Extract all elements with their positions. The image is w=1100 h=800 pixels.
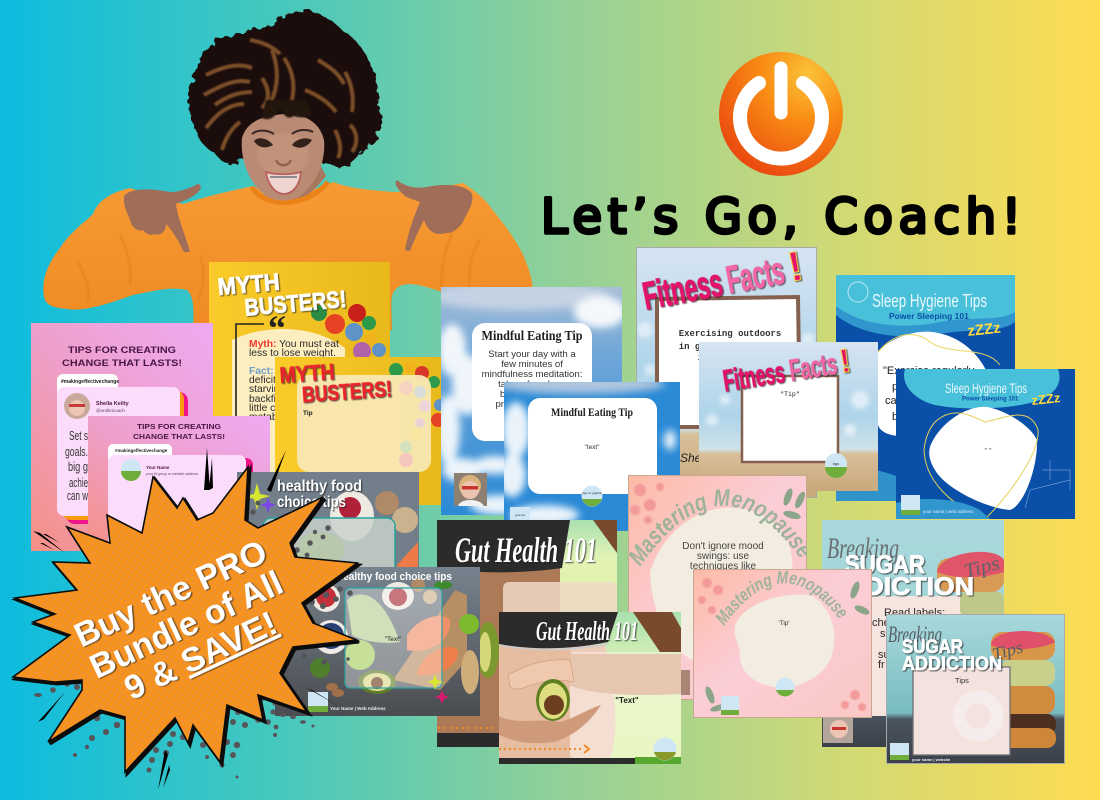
eyes [254,138,312,148]
burst text [69,532,303,718]
tip text: breaths and be [500,389,564,400]
tip text: check [872,617,901,629]
smile [266,172,301,194]
black speed lines [33,448,340,790]
leaves [704,580,871,713]
salmon [407,616,450,651]
card: Healthy Food Choice Tips back [237,472,419,569]
tip text: Exercising outdoors [679,329,781,339]
bokeh [637,322,815,376]
logo square [890,743,909,760]
logo circle [776,678,794,696]
card: Fitness Facts front [699,342,878,491]
heading: BUSTERS! [244,286,347,322]
hair fringe [262,100,312,119]
mushrooms [375,491,399,515]
avatar [823,717,853,743]
heading: Mindful Eating Tip [551,405,633,419]
collar [252,182,328,203]
heading: ADDICTION [902,654,1002,675]
tip text: Start your day with a [488,349,576,360]
body [499,645,570,758]
heading: SUGAR [902,637,963,658]
card: Myth Busters back [209,262,390,472]
card: Breaking Sugar Addiction front [886,614,1065,764]
placeholder: "Text" [385,636,402,643]
paper patch [650,508,792,668]
brows [252,130,313,134]
footer: Your Name | Web Address [330,706,386,711]
white blob [929,407,1037,510]
clouds [495,374,676,525]
heading: CHANGE THAT LASTS! [62,358,182,369]
tip text: su [878,649,890,661]
clouds [430,282,626,515]
tip text [682,541,764,572]
tip text: Set s [69,428,88,443]
inner card [108,455,246,555]
curved heading [640,506,806,567]
tip text: techniques like [690,561,757,572]
power stem [774,68,788,113]
salmon [397,542,418,602]
tip text: s [880,628,886,640]
woman pointing down [43,10,533,330]
tip: "Tip" [780,391,800,398]
curved heading [724,583,846,628]
tip text: goals. [65,444,88,459]
tip text: ca [885,395,898,407]
note [850,596,977,716]
dark footer [499,758,635,764]
brown arm [633,612,681,652]
card: Mindful Eating Tip front: your pic [515,513,526,517]
tip: 'Tip' [778,620,790,627]
placeholder text: "Text" [615,696,639,705]
bokeh [706,391,869,436]
sparkle lime [244,483,270,510]
sweater folds [78,225,480,302]
hashtag tab [57,374,118,398]
footer text: your name | website [912,757,951,762]
cherries bowl [382,582,414,610]
tips script: Tips [990,637,1025,664]
heading: TIPS FOR CREATING [137,422,221,431]
card: Fitness Facts back: in green spaces can [679,342,781,352]
card: Fitness Facts front: logo [833,462,839,466]
heading [277,478,362,511]
myth text: starving [249,384,285,395]
signature: Sheila [680,451,714,465]
card: Sleep Hygiene Tips back [836,275,1015,501]
tip text: can w [67,488,88,503]
pale donut [959,697,997,735]
paper patch [735,595,834,688]
tip text [65,428,88,503]
heading: MYTH [217,269,281,301]
avatar [680,670,690,695]
hair highlights [204,40,356,158]
yellow contour [878,335,1000,365]
white frame [742,376,838,462]
placeholder text: "text" [584,444,600,451]
heading: Mindful Eating Tip [482,329,583,344]
heading [902,637,1002,675]
donut stack [991,631,1056,748]
card: Tips for Creating Change front: #makingeffectivechange [115,448,168,453]
burst body [13,467,357,772]
lower hand [499,705,601,743]
heading: healthy food choice tips [337,571,452,583]
title: Let's Go, Coach!: Let’s Go, Coach! [541,189,1021,245]
mushrooms [411,578,425,592]
photo frame [657,297,800,427]
tip text: Read labels: [884,607,945,619]
translucent panel [570,652,681,758]
logo square [308,692,328,712]
zzz: zZZz [967,320,1002,340]
tip text: "Exercise regularly [883,365,975,377]
tip text: goals [521,409,544,420]
tip text: b [892,411,898,423]
face [242,114,324,200]
tips script: Tips [962,552,1002,583]
power ring [740,83,822,159]
heading: Facts [787,346,840,388]
tip text: Don't ignore mood [682,541,764,552]
heading [217,263,347,324]
bed line art [1025,460,1070,508]
avatar [64,393,90,419]
tip text: take a few deep [498,379,566,390]
heading: CHANGE THAT LASTS! [133,432,225,441]
heading [826,551,974,601]
heading: BUSTERS! [301,376,393,407]
translucent panel [503,582,617,642]
hashtag tab [108,444,172,464]
broccoli [310,658,330,678]
moon line art [848,282,868,302]
myth text [249,339,339,423]
card: Sleep Hygiene Tips front [896,369,1075,519]
footer [836,466,896,501]
logo placeholder [121,459,141,479]
translucent note [297,375,431,472]
burst text: Bundle of All [84,564,289,687]
name: Your Name [146,465,170,470]
black waistband [499,612,618,648]
cutting board [393,590,467,690]
cherries bowl [330,491,374,541]
placeholder: " " [985,448,992,455]
berries bowl [312,584,340,612]
card: Healthy Food Choice Tips front [275,567,480,716]
green background [560,520,617,615]
tip text: BLIT Your [310,559,349,569]
inner card [57,387,180,516]
bracket [236,324,264,480]
sparkle purple [260,497,276,513]
tip text: present with your [495,399,569,410]
heading: SUGAR [845,551,925,579]
heading: healthy food [277,478,362,495]
tip text: p [892,381,898,393]
tip text: mindfulness meditation: [482,369,582,380]
tip text: big g [68,459,88,474]
frame [263,518,395,608]
accent edge [112,458,253,558]
brush background [232,329,345,500]
logo square [510,507,530,531]
sweater [43,182,533,330]
heading: ! [837,342,853,380]
light blue header [904,369,1060,409]
pale circles [399,381,431,467]
logo: power icon [719,52,843,176]
flowers [698,578,866,711]
script heading: Breaking [888,622,942,647]
apple [345,640,375,670]
note [913,667,1010,755]
tip text [482,349,582,420]
sparkles [427,674,443,690]
footer text: your name | web address [923,509,974,514]
burst text: 9 & SAVE! [119,604,283,708]
card: Tips for Creating Change back: #makingeffectivechange [61,379,119,385]
white text card [472,323,592,441]
tip text: swings: use [697,551,750,562]
card: Fitness Facts back: improve mood [698,353,762,363]
donut [937,558,1004,592]
card: Mindful Eating Tip front: logo or graphic [582,491,602,495]
card: Tips for Creating Change front [88,416,270,542]
black waistband [437,520,570,572]
accent edges [66,392,188,524]
heading: Fitness [720,354,787,398]
bok choy [347,594,400,643]
heading: Fitness [639,261,726,319]
nose [276,160,291,165]
heading [62,345,182,369]
card: Tips for Creating Change front: your fit group or website address [146,472,198,476]
tip text: achie [69,475,88,490]
card: Mastering Menopause front: Mastering Menopause [716,570,846,626]
tip text [872,607,945,671]
blueberries bowl [314,620,348,654]
name: Sheila Keilty [96,401,130,407]
almonds [326,683,338,691]
logo square [721,696,739,715]
forearm [570,654,681,695]
heading: ! [784,242,807,290]
card: Breaking Sugar Addiction back [822,520,1004,747]
burst text: Buy the PRO [69,533,273,655]
heading [133,422,225,441]
flowers [630,483,664,524]
tip text [883,365,975,423]
mid blue wave [836,300,1015,336]
card: Myth Busters front [275,357,441,505]
heading: TIPS FOR CREATING [68,345,176,356]
frame [345,588,442,688]
avatar photo [454,473,487,506]
leaves [782,487,807,521]
myth text: deficit [249,375,276,386]
myth text: Fact: You need a [249,366,328,377]
tip text: fr [878,659,885,671]
brown arm [593,520,617,553]
braces [270,176,297,178]
card: Fitness Facts back [636,242,817,498]
bottom wave [896,499,990,519]
upper hand [508,660,574,689]
dotted arrow [438,727,498,729]
logo circle [582,486,602,506]
right hand [396,180,472,251]
tip text: few minutes of [501,359,563,370]
neck [254,150,326,204]
logo circle [825,453,847,475]
heading: Sleep Hygiene Tips [945,380,1027,396]
quote mark: “ [268,308,286,348]
avocado [477,622,499,678]
dotted arrow [499,745,589,753]
card: Mindful Eating Tip front [504,382,680,531]
pepper [434,581,452,589]
bottle caps [389,361,446,427]
card: Mastering Menopause front [693,569,872,718]
heading: ADDICTION [826,573,974,601]
tip label: Tip [303,410,313,417]
avocado [536,679,570,721]
ginger [461,650,479,694]
bottle caps [311,304,386,360]
myth text: little cals [249,403,288,414]
zzz: zZZz [1031,390,1062,408]
myth text: less to lose weight. [249,348,336,359]
heading: choice tips [277,494,346,511]
myth text: backfires [249,394,290,405]
bottom dark [437,733,499,747]
card: Gut Health 101 back [437,520,617,747]
card: Tips for Creating Change back [31,323,213,551]
logo circle [654,738,676,760]
card: Mastering Menopause back: Mastering Menopause [628,489,807,566]
tips label: Tips [955,676,969,685]
cheek light [257,133,309,177]
burst shadow [15,469,359,774]
subtitle: Power Sleeping 101 [962,396,1019,402]
light blue header [836,275,1015,326]
halftone dots [34,500,353,778]
card: Mastering Menopause back [628,475,807,700]
subtitle: Power Sleeping 101 [889,311,969,321]
card: Mindful Eating Tip back [441,287,622,515]
starburst callout [13,467,359,774]
card: Tips for Creating Change back: @undietcoach [96,408,125,413]
myth text: Myth: You must eat [249,339,339,350]
avocado [358,670,396,694]
yellow contour [924,413,1038,519]
script heading: Breaking [827,532,899,565]
heading: MYTH [279,359,335,388]
logo square [901,495,920,515]
white card [528,398,657,494]
white blob [878,332,993,437]
myth text: metabolism [249,412,302,423]
afro hair [187,10,381,167]
card: Gut Health 101 front [499,612,681,764]
greens [296,532,344,568]
heading [279,355,393,409]
lime [459,614,479,634]
left hand [124,184,201,252]
